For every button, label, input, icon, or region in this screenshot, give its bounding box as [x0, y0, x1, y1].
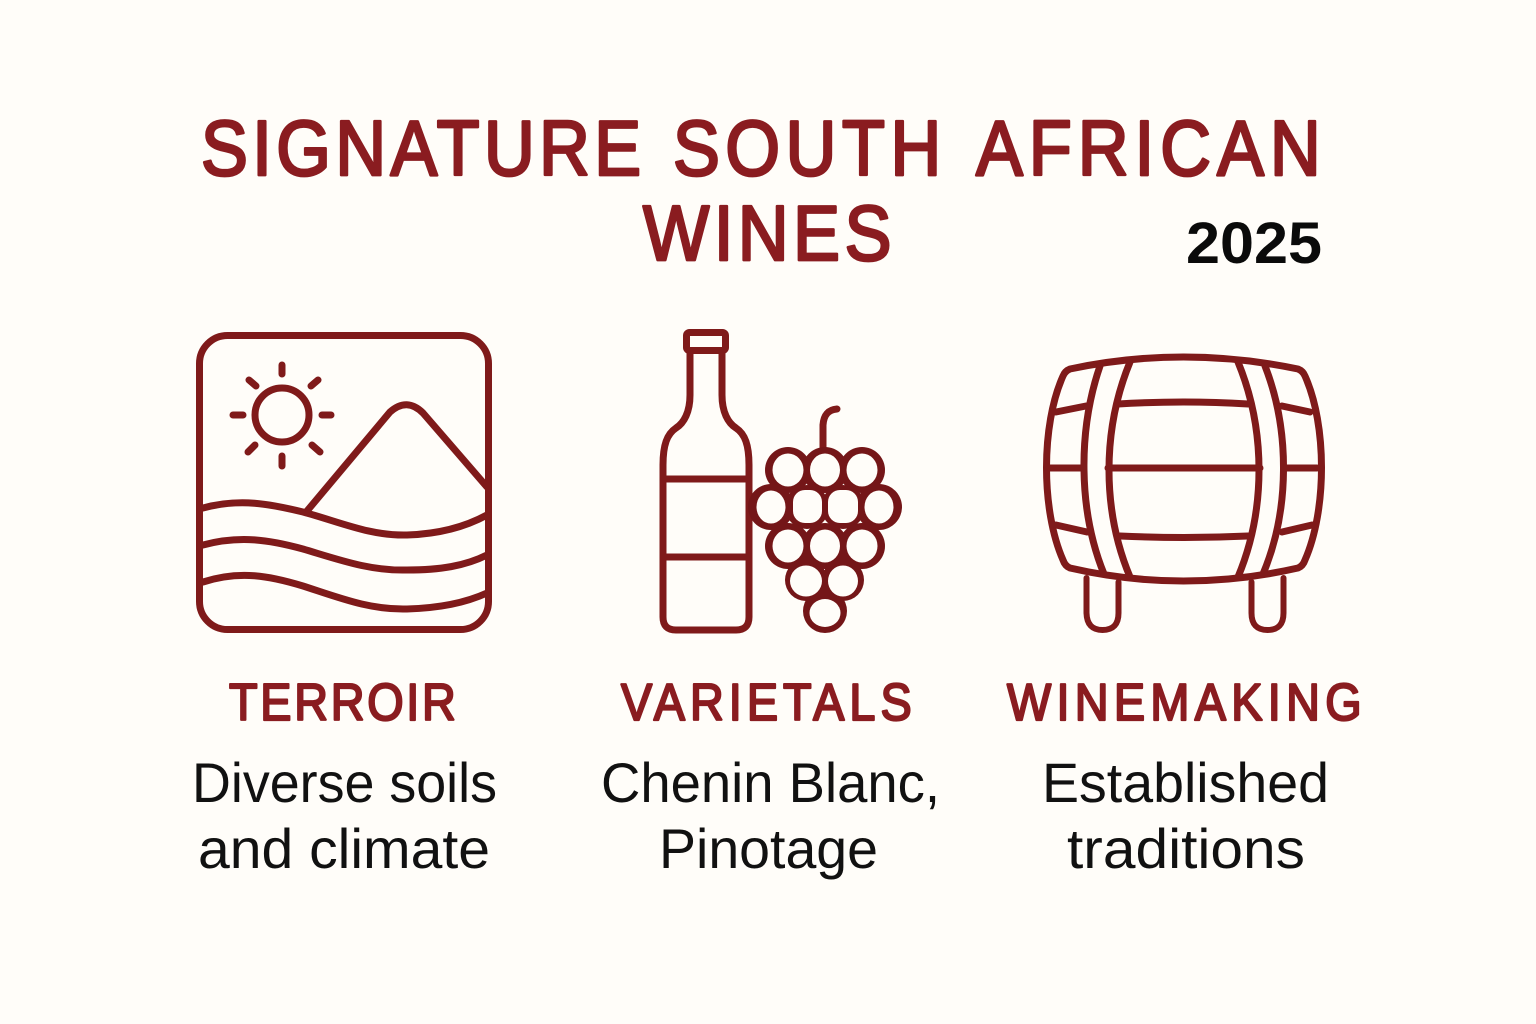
description: terroir: and climate [198, 817, 490, 880]
label: varietals: VARIETALS [621, 674, 912, 732]
year label: 2025 [1186, 211, 1322, 276]
icon: wine barrel on legs [1046, 357, 1322, 630]
panel: terroir [192, 336, 497, 880]
description: winemaking: Established [1042, 751, 1329, 814]
description: winemaking [1042, 751, 1329, 880]
description: winemaking: traditions [1067, 817, 1305, 880]
panel: varietals [601, 332, 940, 880]
description: terroir [192, 751, 497, 880]
panel: winemaking [1007, 357, 1362, 880]
description: varietals: Chenin Blanc, [601, 751, 940, 814]
label: terroir: TERROIR [229, 674, 456, 732]
title: SOUTH [673, 105, 941, 192]
icon: wine bottle [663, 332, 749, 630]
description: terroir: Diverse soils [192, 751, 497, 814]
title [201, 105, 1321, 277]
label: winemaking: WINEMAKING [1007, 674, 1362, 732]
title: SIGNATURE [201, 105, 641, 192]
title: WINES [643, 190, 891, 277]
description: varietals: Pinotage [659, 817, 878, 880]
description: varietals [601, 751, 940, 880]
icon: landscape with sun, mountain and rolling hills [200, 336, 488, 630]
title: AFRICAN [976, 105, 1321, 192]
icon: grape bunch [748, 409, 902, 633]
